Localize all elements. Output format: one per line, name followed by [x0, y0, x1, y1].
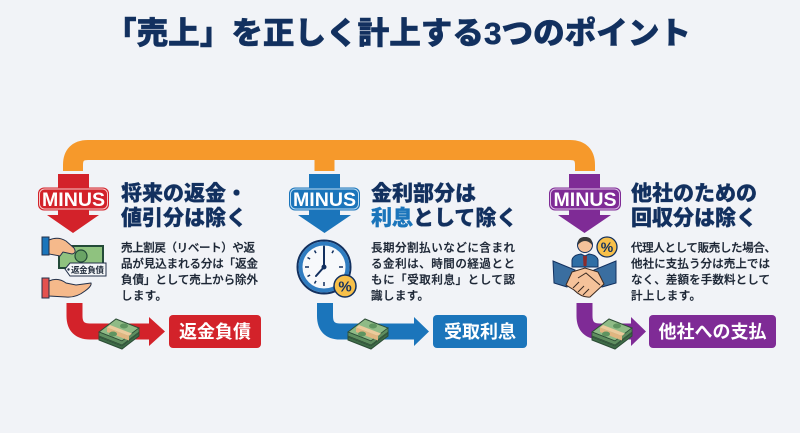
body text: 識します。: [371, 290, 429, 302]
heading: 将来の返金・: [121, 182, 247, 206]
heading: [631, 182, 757, 230]
body text: [371, 240, 516, 302]
icon: handshake with agent: %: [601, 239, 614, 255]
icon: handshake with agent: [553, 237, 617, 297]
orange connector: [73, 150, 585, 171]
label: refund liabilities: 返金負債: [179, 322, 251, 342]
label: refund liabilities: [169, 315, 261, 348]
icon: money stack: [348, 319, 388, 349]
heading: 値引分は除く: [121, 207, 247, 230]
body text: なく、差額を手数料として: [631, 272, 770, 286]
minus arrow: purple: [549, 174, 621, 233]
flow arrow: purple: [584, 303, 646, 346]
flow arrow: blue: [325, 303, 429, 346]
icon: money stack: [592, 319, 632, 349]
title: 「売上」を正しく計上する3つのポイント: [105, 16, 691, 51]
body text: 売上割戻（リベート）や返: [121, 240, 256, 254]
body text: [121, 240, 258, 302]
minus arrow: blue: [289, 174, 360, 233]
panel: interest: [289, 174, 527, 349]
minus arrow: purple: MINUS: [554, 189, 616, 211]
minus arrow: red: [38, 174, 109, 233]
icon: clock with percent: [298, 240, 356, 297]
panel: refund liabilities: [38, 174, 261, 349]
icon: money stack: [99, 319, 139, 349]
heading: 回収分は除く: [631, 207, 757, 230]
body text: 負債」として売上から除外: [121, 272, 258, 286]
heading: [371, 182, 517, 230]
heading: 金利部分は: [371, 182, 476, 206]
body text: る金利は、時間の経過とと: [371, 256, 515, 270]
label: interest received: [433, 315, 527, 348]
heading: 利息として除く: [371, 206, 517, 230]
body text: 長期分割払いなどに含まれ: [371, 240, 516, 254]
body text: 他社に支払う分は売上では: [631, 256, 770, 270]
heading: 他社のための: [631, 182, 757, 206]
body text: 計上します。: [631, 288, 701, 302]
minus arrow: red: MINUS: [42, 189, 105, 211]
icon: hands and money: 返金負債: [71, 265, 104, 275]
icon: hands and money: [42, 237, 106, 298]
body text: [631, 240, 776, 302]
label: payments to others: 他社への支払: [658, 322, 766, 342]
label: interest received: 受取利息: [444, 321, 516, 342]
body text: 代理人として販売した場合、: [631, 240, 776, 254]
flow arrow: red: [74, 303, 165, 346]
heading: [121, 182, 247, 230]
body text: します。: [121, 290, 167, 302]
body text: 品が見込まれる分は「返金: [121, 256, 258, 270]
icon: clock with percent: %: [338, 278, 352, 296]
panel: payments to others: [549, 174, 776, 349]
label: payments to others: [649, 315, 776, 348]
minus arrow: blue: MINUS: [293, 189, 356, 211]
body text: もに「受取利息」として認: [371, 272, 516, 286]
